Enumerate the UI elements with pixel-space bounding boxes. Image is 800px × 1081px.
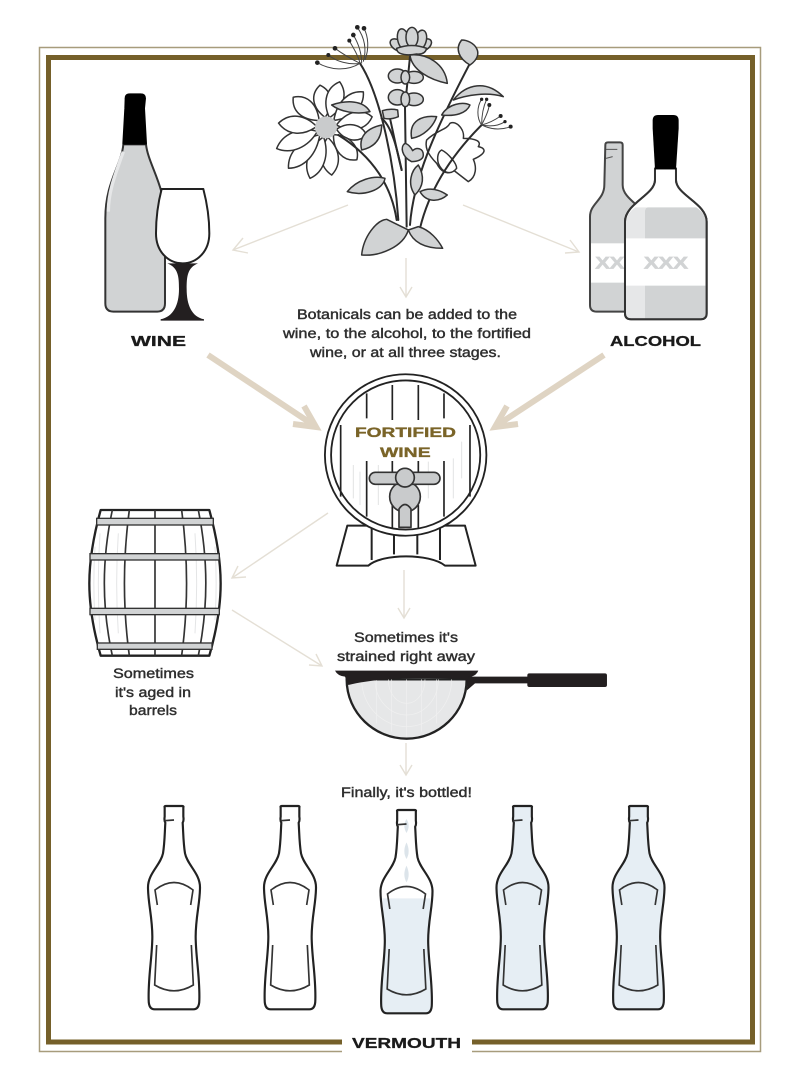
bottle 2 bbox=[264, 806, 316, 1009]
arrow: barrel to strainer bbox=[232, 610, 322, 666]
text: aged in barrels bbox=[113, 666, 194, 718]
bottle row bbox=[148, 806, 664, 1013]
stems bbox=[338, 57, 482, 228]
arrow: botanicals to text bbox=[400, 258, 412, 297]
icon: fortified wine barrel bbox=[328, 377, 483, 566]
daisy flower bbox=[273, 79, 374, 181]
staves bbox=[341, 385, 470, 528]
barrel stand bbox=[337, 526, 476, 566]
label: wine: WINE bbox=[131, 334, 186, 350]
arrow: wine to fortified wine bbox=[208, 355, 316, 427]
text: strained right away: Sometimes it's bbox=[354, 630, 458, 645]
arrow: alcohol to fortified wine bbox=[495, 355, 604, 427]
icon: tap bbox=[369, 468, 440, 527]
text: botanicals note: wine, or at all three stages. bbox=[309, 345, 501, 360]
front bottle: XXX bbox=[644, 253, 688, 272]
text: finally bottled: Finally, it's bottled! bbox=[341, 785, 472, 800]
front bottle bbox=[625, 115, 707, 319]
text: botanicals note bbox=[282, 307, 531, 360]
label: alcohol: ALCOHOL bbox=[610, 334, 701, 350]
text: strained right away bbox=[337, 630, 475, 664]
barrel head bbox=[328, 377, 483, 533]
bottle 4: full bbox=[497, 806, 548, 1009]
bottle 1 bbox=[148, 806, 200, 1009]
title: vermouth: VERMOUTH bbox=[352, 1035, 461, 1052]
wine glass bbox=[156, 189, 209, 321]
label: fortified wine bbox=[355, 424, 456, 460]
arrow: fortified wine to barrel bbox=[232, 513, 328, 578]
arrow: strainer to bottles bbox=[400, 743, 412, 775]
back bottle bbox=[590, 142, 647, 312]
text: aged in barrels: Sometimes bbox=[113, 666, 194, 681]
text: botanicals note: Botanicals can be added to the bbox=[297, 307, 517, 322]
arrow: botanicals to alcohol bbox=[463, 205, 579, 253]
leaves and buds bbox=[332, 27, 503, 255]
arrow: fortified wine to strainer bbox=[398, 570, 410, 618]
bottle 3: filling bbox=[381, 810, 432, 1013]
bottle 5: full bbox=[613, 806, 664, 1009]
text: aged in barrels: it's aged in bbox=[115, 685, 191, 700]
icon: strainer bbox=[335, 671, 607, 739]
wine bottle bbox=[105, 94, 165, 312]
text: aged in barrels: barrels bbox=[129, 703, 177, 718]
dill seed heads bbox=[317, 27, 511, 129]
arrow: botanicals to wine bbox=[233, 205, 348, 253]
back bottle: XXX bbox=[595, 254, 639, 273]
text: botanicals note: wine, to the alcohol, to the fortified bbox=[282, 326, 531, 341]
white flower bbox=[426, 123, 484, 182]
label: fortified wine: WINE bbox=[380, 444, 431, 460]
icon: botanicals bouquet bbox=[273, 25, 513, 255]
icon: aging barrel bbox=[89, 510, 221, 656]
text: strained right away: strained right away bbox=[337, 649, 475, 664]
icon: wine bottle and glass bbox=[105, 94, 209, 321]
label: fortified wine: FORTIFIED bbox=[355, 424, 456, 440]
icon: alcohol bottles bbox=[590, 115, 707, 319]
